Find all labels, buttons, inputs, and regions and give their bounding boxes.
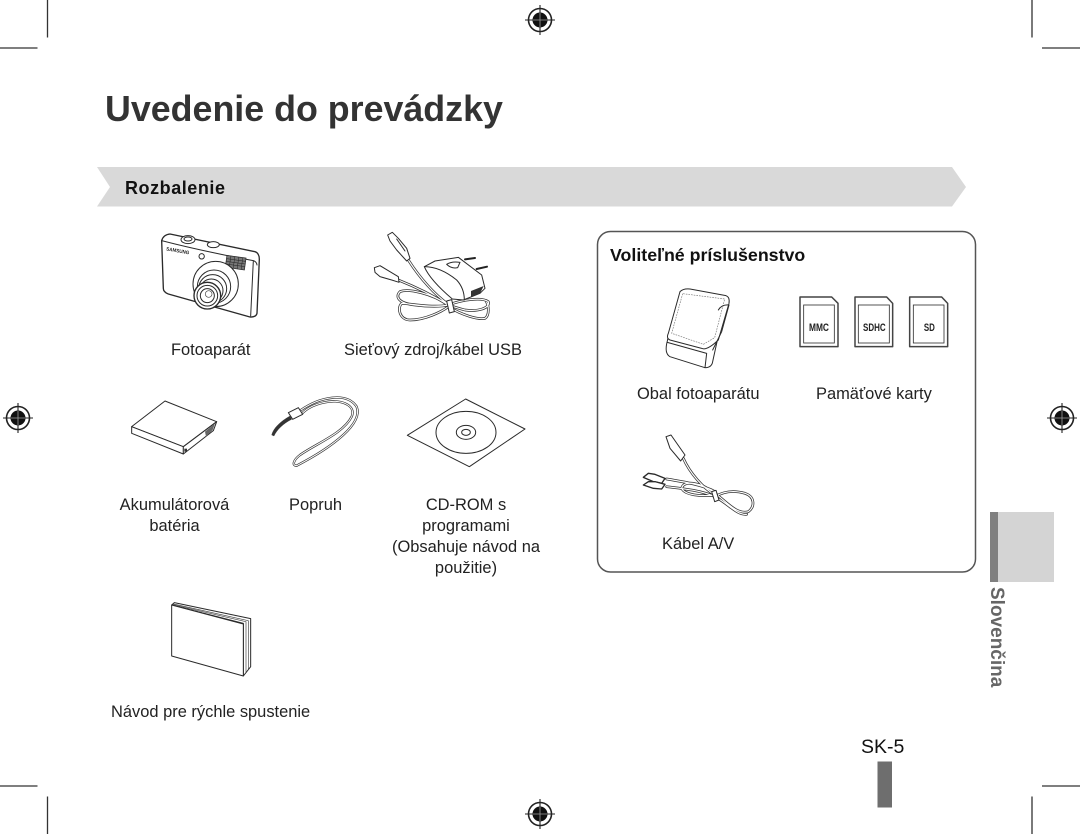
label: battery <box>120 496 230 535</box>
label: camera: Fotoaparát <box>171 341 250 359</box>
icon: camera case <box>666 289 729 368</box>
page marker block <box>878 762 892 808</box>
icon: wrist strap <box>272 398 358 466</box>
section banner <box>97 167 966 206</box>
panel heading: optional accessories: Voliteľné príslušenstvo <box>610 245 805 265</box>
title: Uvedenie do prevádzky <box>105 89 503 129</box>
section heading: Rozbalenie <box>125 178 226 198</box>
icon: quick start guide booklet <box>172 603 251 676</box>
label: CD-ROM: použitie) <box>435 559 497 577</box>
icon: registration mark top <box>525 5 555 35</box>
label: adapter and USB cable: Sieťový zdroj/kábel USB <box>344 341 522 359</box>
label: battery: Akumulátorová <box>120 496 229 514</box>
panel: optional accessories frame <box>598 232 976 572</box>
icon: camera: SAMSUNG <box>166 246 190 256</box>
icon: CD-ROM <box>407 399 525 467</box>
icon: registration mark bottom <box>525 799 555 829</box>
icon: A/V cable <box>643 435 753 514</box>
label: CD-ROM: CD-ROM s <box>426 496 506 514</box>
icon: memory cards <box>800 297 948 347</box>
icon: MMC card: MMC <box>809 322 829 334</box>
side tab <box>990 512 1054 582</box>
label: CD-ROM <box>392 496 540 577</box>
icon: battery <box>132 401 217 454</box>
label: memory cards: Pamäťové karty <box>816 385 932 403</box>
label: A/V cable: Kábel A/V <box>662 535 734 553</box>
label: battery: batéria <box>149 517 200 535</box>
label: quick start guide: Návod pre rýchle spustenie <box>111 703 310 721</box>
page number: SK-5 <box>861 736 904 758</box>
icon: SD card: SD <box>924 322 935 334</box>
label: camera case: Obal fotoaparátu <box>637 385 759 403</box>
icon: registration mark right <box>1047 403 1077 433</box>
icon: camera <box>162 234 259 317</box>
language tab label: Slovenčina <box>986 587 1007 687</box>
label: CD-ROM: programami <box>422 517 510 535</box>
icon: AC adapter and USB cable <box>374 232 488 320</box>
icon: SDHC card: SDHC <box>863 322 886 334</box>
icon: registration mark left <box>3 403 33 433</box>
label: strap: Popruh <box>289 496 342 514</box>
label: CD-ROM: (Obsahuje návod na <box>392 538 540 556</box>
icon: MMC card <box>800 297 838 347</box>
icon: SDHC card <box>855 297 893 347</box>
icon: SD card <box>910 297 948 347</box>
